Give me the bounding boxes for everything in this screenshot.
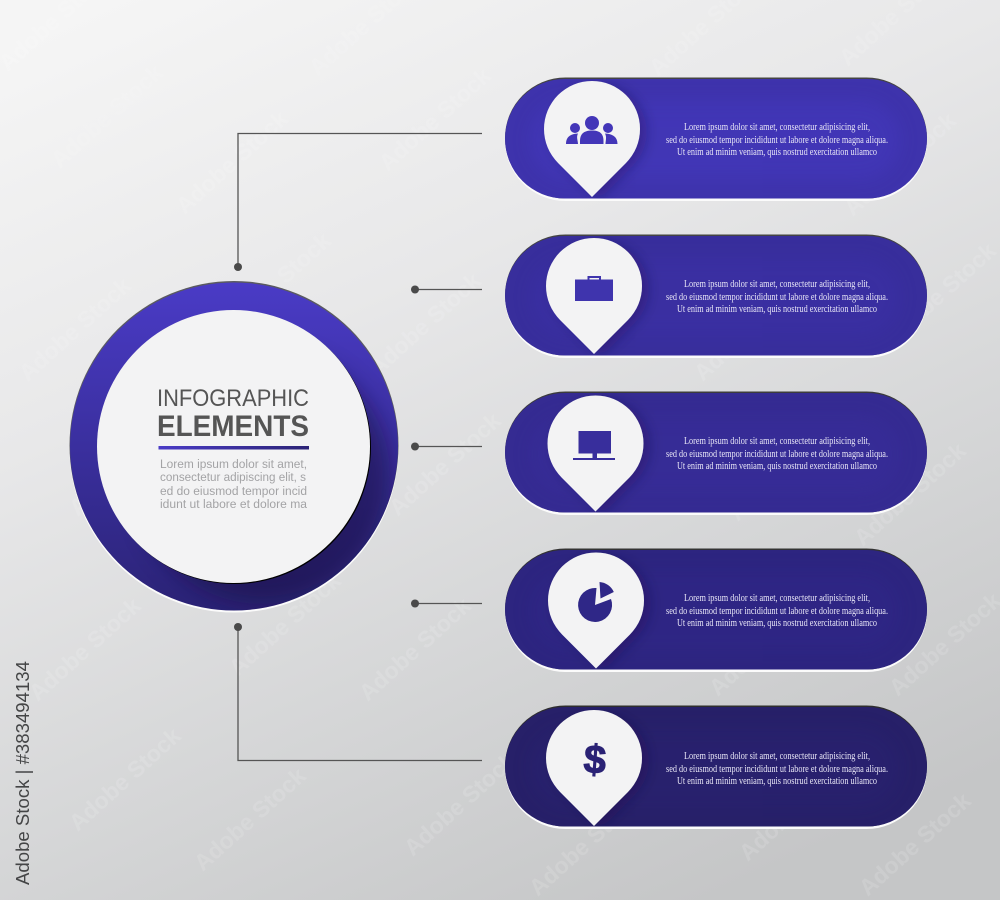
stock watermarks: Adobe Stock xyxy=(364,267,486,381)
panel: item 4 xyxy=(505,548,927,672)
text: Lorem ipsum dolor sit amet, consectetur adipisicing elit, xyxy=(684,751,870,762)
stock watermarks: Adobe Stock xyxy=(171,105,293,219)
text: sed do eiusmod tempor incididunt ut labore et dolore magna aliqua. xyxy=(666,449,888,460)
text: sed do eiusmod tempor incididunt ut labore et dolore magna aliqua. xyxy=(666,764,888,775)
pin xyxy=(548,552,644,668)
text xyxy=(666,751,888,787)
stock watermarks: Adobe Stock xyxy=(709,77,831,191)
stock watermarks: Adobe Stock xyxy=(559,562,681,676)
connector: top xyxy=(234,134,482,271)
circle body text: ed do eiusmod tempor incid xyxy=(160,484,307,498)
text: Lorem ipsum dolor sit amet, consectetur adipisicing elit, xyxy=(684,279,870,290)
panel: item 5 xyxy=(505,706,927,829)
stock watermarks: Adobe Stock xyxy=(399,747,521,861)
text: Ut enim ad minim veniam, quis nostrud exercitation ullamco xyxy=(677,461,877,472)
stock watermarks: Adobe Stock xyxy=(544,402,666,516)
stock watermarks: Adobe Stock xyxy=(849,437,971,551)
central circle: ELEMENTS xyxy=(157,410,309,443)
stock watermarks: Adobe Stock xyxy=(534,87,656,201)
panel: item 1 xyxy=(505,78,927,201)
stock watermarks: Adobe Stock xyxy=(14,272,136,386)
panel: item 2 xyxy=(505,234,927,358)
stock watermarks: Adobe Stock xyxy=(24,592,146,706)
pin xyxy=(548,395,644,512)
icon: presentation board xyxy=(573,431,615,460)
text: Lorem ipsum dolor sit amet, consectetur adipisicing elit, xyxy=(684,436,870,447)
icon: dollar: $ xyxy=(582,737,608,783)
connector: second xyxy=(411,286,482,294)
icon: people xyxy=(566,116,618,144)
stock watermarks: Adobe Stock xyxy=(64,407,186,521)
text: Ut enim ad minim veniam, quis nostrud exercitation ullamco xyxy=(677,304,877,315)
text: sed do eiusmod tempor incididunt ut labore et dolore magna aliqua. xyxy=(666,292,888,303)
text: sed do eiusmod tempor incididunt ut labore et dolore magna aliqua. xyxy=(666,135,888,146)
central circle xyxy=(70,281,398,612)
stock watermarks: Adobe Stock xyxy=(544,242,666,356)
stock watermarks: Adobe Stock xyxy=(704,587,826,701)
stock watermarks: Adobe Stock xyxy=(724,412,846,526)
panel: item 3 xyxy=(505,392,927,515)
heading: INFOGRAPHIC xyxy=(157,385,309,412)
circle body text: Lorem ipsum dolor sit amet, xyxy=(160,457,307,471)
connector: bottom xyxy=(234,623,482,760)
stock watermarks: Adobe Stock xyxy=(839,107,961,221)
stock watermarks: Adobe Stock xyxy=(354,592,476,706)
text xyxy=(666,279,888,315)
stock id label: Adobe Stock | #383494134 xyxy=(13,661,33,885)
circle body text xyxy=(160,457,307,511)
pin xyxy=(546,710,642,826)
stock watermarks: Adobe Stock xyxy=(689,272,811,386)
text: Lorem ipsum dolor sit amet, consectetur adipisicing elit, xyxy=(684,593,870,604)
pin xyxy=(546,238,642,354)
icon: briefcase xyxy=(575,276,613,301)
circle body text: consectetur adipiscing elit, s xyxy=(160,470,306,484)
pin xyxy=(544,81,640,197)
stock watermarks: Adobe Stock xyxy=(734,752,856,866)
heading rule xyxy=(158,446,309,450)
stock watermarks: Adobe Stock xyxy=(64,722,186,836)
connector: third xyxy=(411,442,482,450)
stock watermarks: Adobe Stock xyxy=(189,762,311,876)
text xyxy=(666,122,888,158)
text xyxy=(666,436,888,472)
stock watermarks: Adobe Stock xyxy=(524,787,646,900)
text: Ut enim ad minim veniam, quis nostrud exercitation ullamco xyxy=(677,618,877,629)
stock watermarks: Adobe Stock xyxy=(879,237,1000,351)
text: Ut enim ad minim veniam, quis nostrud exercitation ullamco xyxy=(677,147,877,158)
text: sed do eiusmod tempor incididunt ut labore et dolore magna aliqua. xyxy=(666,606,888,617)
stock watermarks: Adobe Stock xyxy=(224,567,346,681)
icon: pie chart xyxy=(578,582,614,622)
stock watermarks: Adobe Stock xyxy=(384,407,506,521)
connector: fourth xyxy=(411,600,482,608)
stock watermarks: Adobe Stock xyxy=(46,59,168,173)
text: Ut enim ad minim veniam, quis nostrud exercitation ullamco xyxy=(677,776,877,787)
circle body text: idunt ut labore et dolore ma xyxy=(160,497,307,511)
text xyxy=(666,593,888,629)
stock watermarks: Adobe Stock xyxy=(854,787,976,900)
text: Lorem ipsum dolor sit amet, consectetur adipisicing elit, xyxy=(684,122,870,133)
stock watermarks: Adobe Stock xyxy=(374,62,496,176)
stock watermarks: Adobe Stock xyxy=(214,227,336,341)
